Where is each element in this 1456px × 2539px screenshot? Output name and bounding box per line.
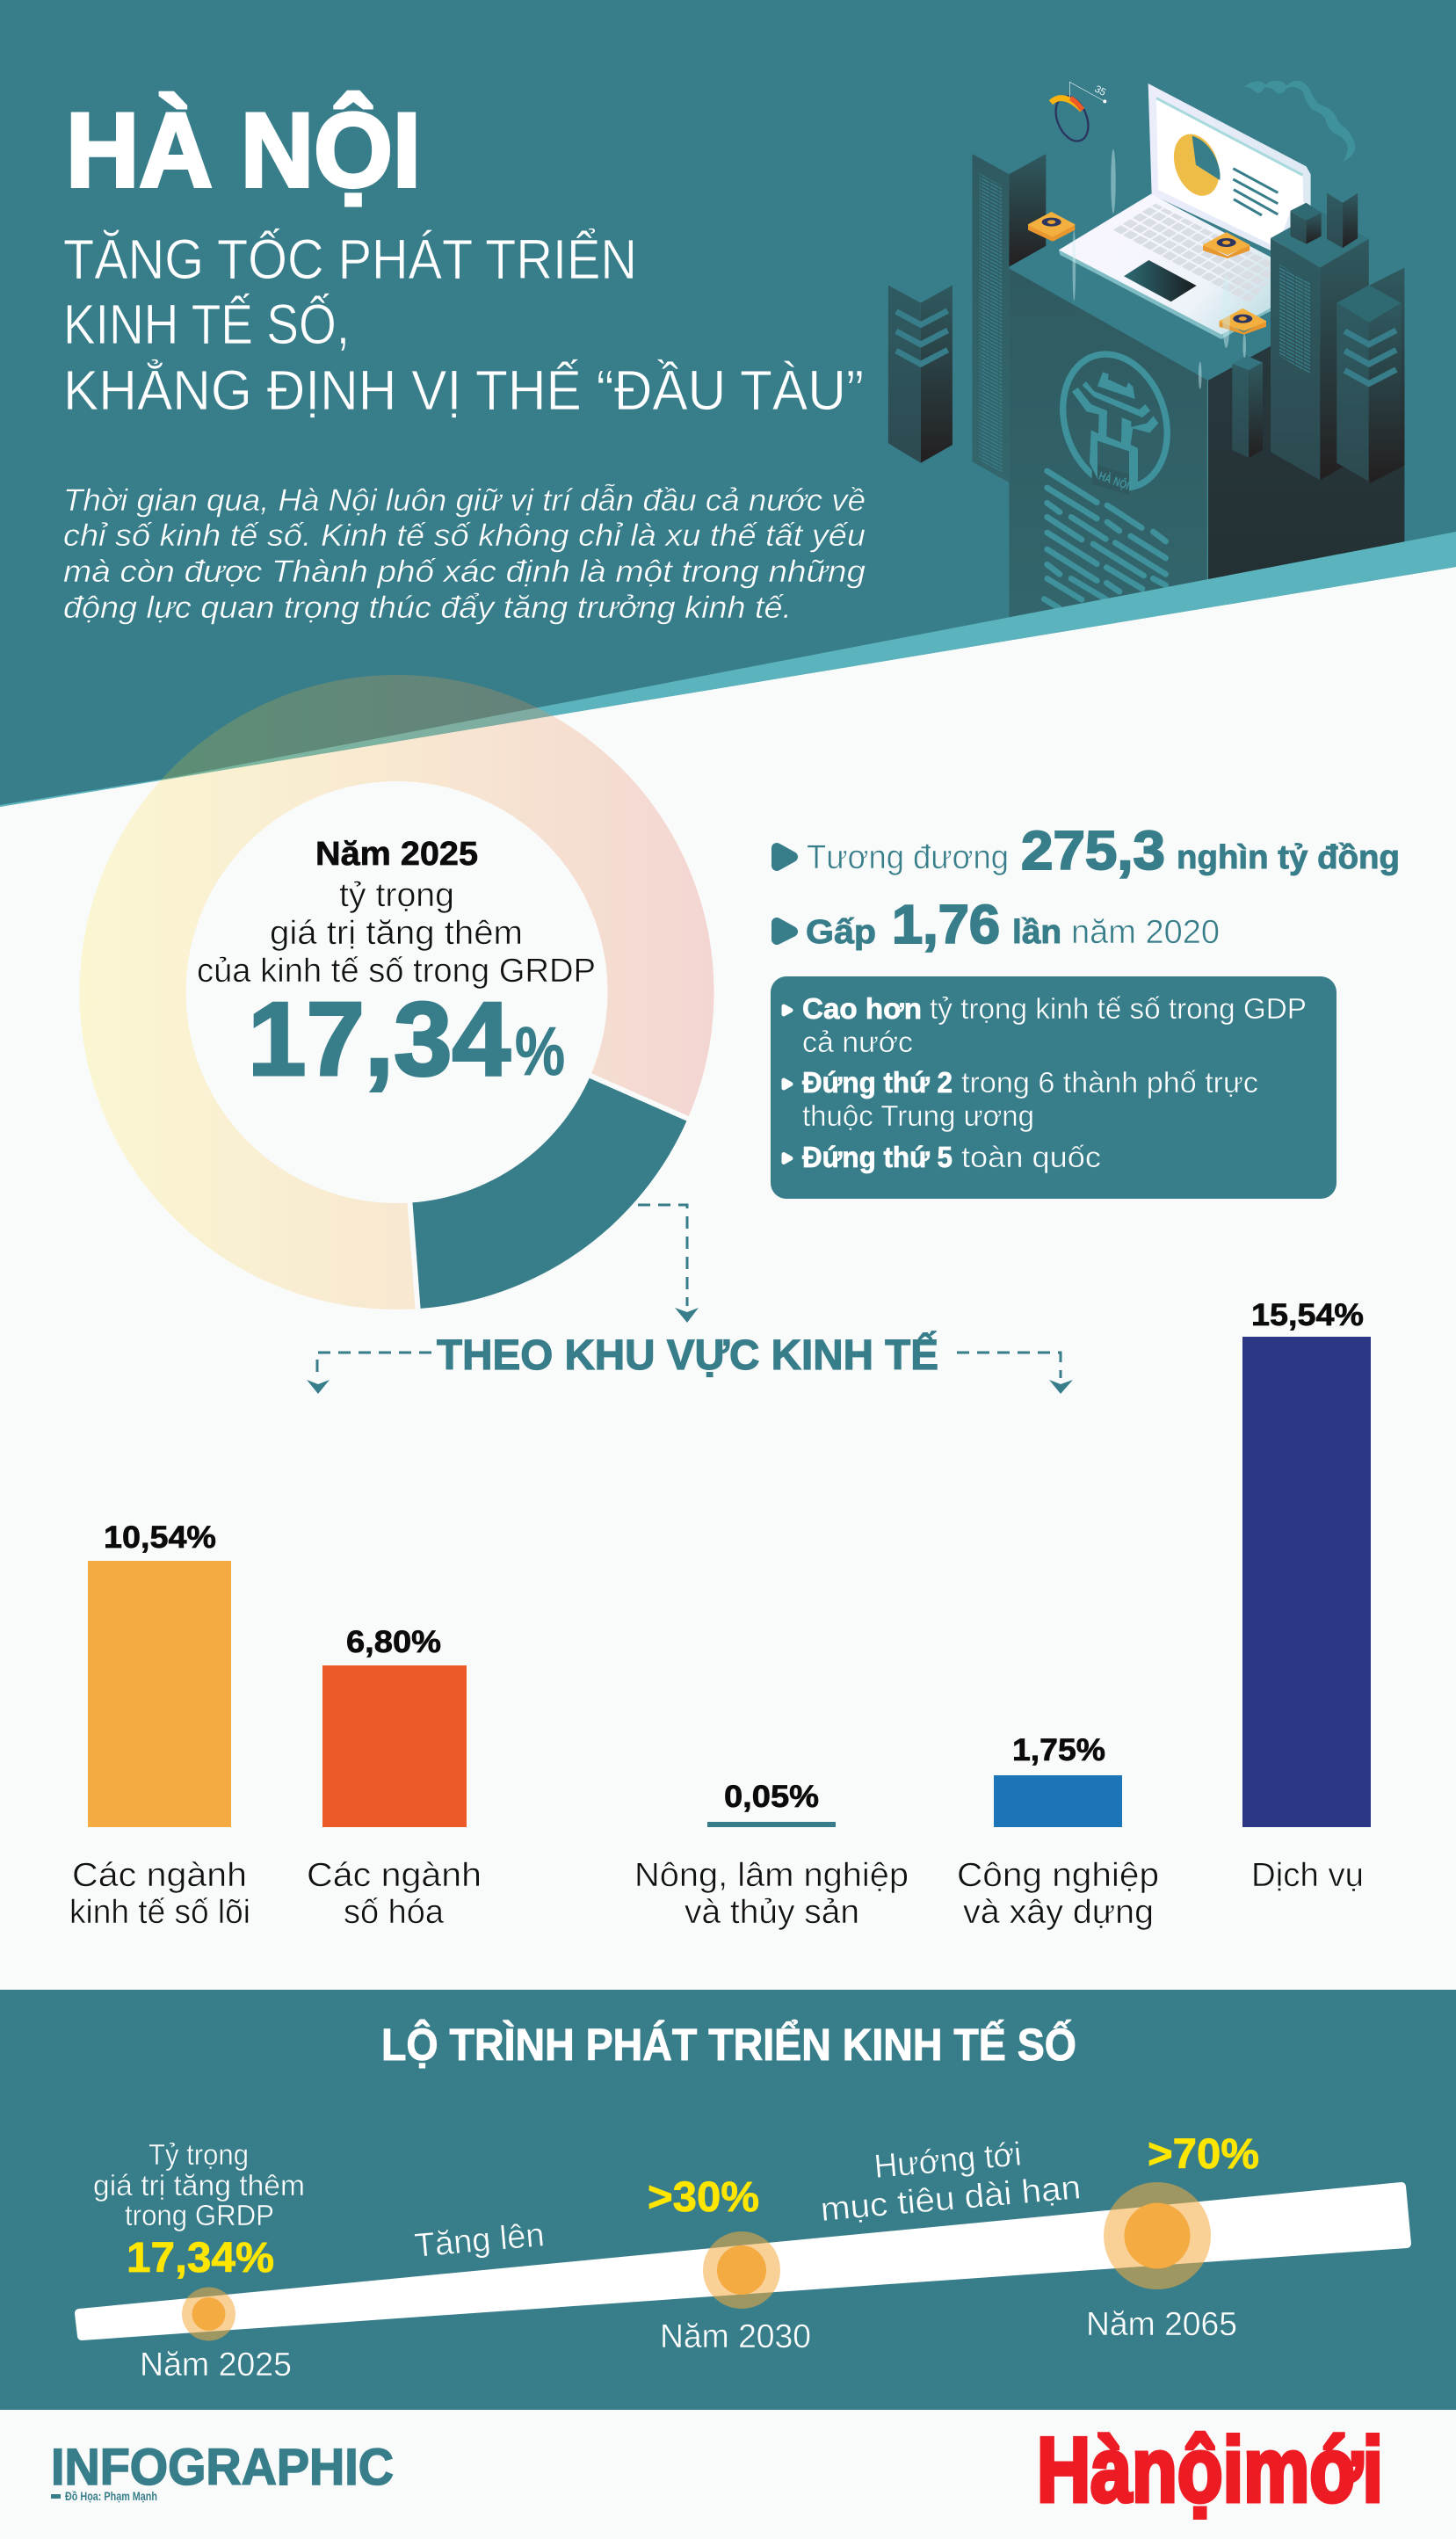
icon: bullet bbox=[784, 1006, 791, 1014]
roadmap heading: LỘ TRÌNH PHÁT TRIỂN KINH TẾ SỐ bbox=[381, 2019, 1076, 2070]
text bars on main building bbox=[1044, 471, 1166, 608]
stat: equivalent value: Tương đương bbox=[807, 839, 1009, 876]
bar: services bbox=[1242, 1298, 1371, 1894]
donut centre text bbox=[197, 836, 596, 1098]
donut centre text: của kinh tế số trong GRDP bbox=[197, 953, 596, 990]
laptop base bbox=[1059, 194, 1289, 337]
intro paragraph: mà còn được Thành phố xác định là một trong những bbox=[63, 555, 866, 589]
bar: industry and construction: Công nghiệp bbox=[957, 1857, 1159, 1894]
stat: multiple of 2020: năm 2020 bbox=[1071, 914, 1220, 951]
bar: digitalised sectors: Các ngành bbox=[307, 1857, 482, 1894]
stat: equivalent value: nghìn tỷ đồng bbox=[1177, 839, 1400, 876]
milestone: 2030 bbox=[648, 2174, 811, 2355]
bar: core digital sectors bbox=[69, 1520, 250, 1931]
label: towards long-term target bbox=[819, 2136, 1083, 2229]
left small tower bbox=[888, 286, 953, 463]
bar chart: economic sectors bbox=[634, 1298, 1371, 1931]
light teal diagonal band bbox=[0, 532, 1456, 807]
milestone: 2025 bbox=[93, 2138, 305, 2383]
white diagonal lower area bbox=[0, 567, 1456, 2539]
orange chips bbox=[1029, 213, 1265, 334]
stat: equivalent value bbox=[777, 821, 1400, 881]
bar: core digital sectors: kinh tế số lõi bbox=[69, 1894, 250, 1931]
tall tower bbox=[972, 154, 1046, 482]
bar: industry and construction: 1,75% bbox=[1012, 1733, 1105, 1767]
milestone: 2065: Năm 2065 bbox=[1086, 2306, 1237, 2343]
icon: play triangle bbox=[777, 923, 793, 939]
icon: cloud bbox=[1245, 81, 1356, 162]
intro paragraph bbox=[63, 483, 866, 625]
logo: Hà Nội Mới: Hànộimới bbox=[1037, 2419, 1383, 2521]
milestone: 2025: giá trị tăng thêm bbox=[93, 2169, 305, 2202]
light glints bbox=[1073, 149, 1246, 389]
milestone: 2025: Năm 2025 bbox=[140, 2347, 292, 2383]
stat: multiple of 2020: lần bbox=[1012, 914, 1061, 951]
emblem: Hà Nội circle bbox=[1047, 341, 1184, 501]
stat: multiple of 2020: Gấp bbox=[806, 914, 876, 951]
donut centre text: Năm 2025 bbox=[315, 836, 478, 873]
intro paragraph: chỉ số kinh tế số. Kinh tế số không chỉ là xu thế tất yếu bbox=[63, 519, 866, 553]
donut centre text: tỷ trọng bbox=[339, 877, 454, 914]
milestone: 2025: 17,34% bbox=[127, 2235, 274, 2281]
arrow: left branch bbox=[307, 1353, 431, 1394]
bar: services: Dịch vụ bbox=[1251, 1857, 1364, 1894]
stat: multiple of 2020: 1,76 bbox=[892, 895, 1000, 955]
intro paragraph: động lực quan trọng thúc đẩy tăng trưởng kinh tế. bbox=[63, 591, 792, 625]
panel: rankings bbox=[771, 976, 1336, 1199]
bar: digitalised sectors: 6,80% bbox=[346, 1625, 441, 1659]
milestone: 2065 bbox=[1086, 2131, 1259, 2343]
milestone: 2025: trong GRDP bbox=[125, 2199, 274, 2231]
donut centre text: % bbox=[515, 1012, 565, 1090]
panel: rankings: tỷ trọng kinh tế số trong GDP bbox=[930, 992, 1307, 1025]
donut centre text: giá trị tăng thêm bbox=[270, 915, 523, 952]
icon: bullet bbox=[784, 1080, 791, 1088]
panel: rankings: Đứng thứ 2 bbox=[802, 1066, 953, 1099]
illustration: isometric city with laptop bbox=[888, 81, 1404, 633]
bar: digitalised sectors bbox=[307, 1625, 482, 1931]
bar chart: digital economy groups bbox=[69, 1520, 482, 1931]
bar: agriculture bbox=[634, 1780, 909, 1931]
emblem: Hà Nội circle: HÀ NỘI bbox=[1097, 469, 1131, 492]
timeline bar bbox=[79, 2187, 1407, 2336]
bar: agriculture: 0,05% bbox=[724, 1780, 819, 1814]
panel: rankings: Cao hơn bbox=[802, 992, 922, 1025]
stat: multiple of 2020 bbox=[777, 895, 1220, 955]
donut centre text: 17,34 bbox=[248, 981, 511, 1098]
panel: rankings: thuộc Trung ương bbox=[802, 1099, 1034, 1132]
city buildings behind laptop bbox=[888, 154, 1404, 633]
panel: digital economy roadmap bbox=[0, 1990, 1456, 2410]
label: towards long-term target: mục tiêu dài hạn bbox=[819, 2169, 1083, 2229]
footer: infographic brand: Đồ Họa: Phạm Mạnh bbox=[65, 2489, 157, 2503]
screen text lines bbox=[1233, 169, 1278, 215]
milestone: 2030: >30% bbox=[648, 2174, 759, 2221]
panel: rankings: trong 6 thành phố trực bbox=[961, 1066, 1258, 1099]
panel: rankings: toàn quốc bbox=[961, 1141, 1101, 1173]
panel: rankings: Đứng thứ 5 bbox=[802, 1141, 953, 1173]
header background bbox=[0, 0, 1456, 809]
intro paragraph: Thời gian qua, Hà Nội luôn giữ vị trí dẫn đầu cả nước về bbox=[63, 483, 866, 518]
donut remainder segment bbox=[80, 675, 714, 1309]
bar: core digital sectors: 10,54% bbox=[104, 1520, 216, 1555]
bar: industry and construction: và xây dựng bbox=[963, 1894, 1154, 1931]
subtitle: KINH TẾ SỐ, bbox=[63, 293, 350, 356]
donut chart bbox=[80, 675, 714, 1314]
subtitle: KHẲNG ĐỊNH VỊ THẾ “ĐẦU TÀU” bbox=[63, 358, 864, 422]
bar: industry and construction bbox=[957, 1733, 1159, 1931]
bar: digitalised sectors: số hóa bbox=[344, 1894, 445, 1931]
milestone: 2025: Tỷ trọng bbox=[148, 2138, 249, 2171]
label: increase: Tăng lên bbox=[413, 2216, 546, 2265]
icon: play triangle bbox=[777, 848, 793, 866]
title: HÀ NỘI bbox=[66, 91, 421, 209]
milestone: 2030: Năm 2030 bbox=[660, 2318, 811, 2355]
bar: services: 15,54% bbox=[1251, 1298, 1364, 1332]
subtitle bbox=[63, 227, 864, 422]
icon: gauge ring bbox=[1050, 82, 1107, 146]
label: towards long-term target: Hướng tới bbox=[873, 2136, 1023, 2186]
section heading: by economic sector: THEO KHU VỰC KINH TẾ bbox=[437, 1331, 938, 1379]
bar: agriculture: và thủy sản bbox=[685, 1894, 859, 1931]
icon: gauge ring: 35 bbox=[1093, 83, 1107, 98]
donut highlighted segment bbox=[410, 1076, 688, 1309]
panel: rankings: cả nước bbox=[802, 1026, 913, 1058]
trackpad bbox=[1124, 260, 1197, 301]
bar: agriculture: Nông, lâm nghiệp bbox=[634, 1857, 909, 1894]
icon: bullet bbox=[784, 1155, 791, 1162]
main building bbox=[1009, 268, 1404, 633]
chart: pie on screen bbox=[1166, 127, 1228, 202]
laptop bbox=[1059, 83, 1311, 339]
arrow: donut to section heading bbox=[638, 1205, 699, 1323]
footer: infographic brand: INFOGRAPHIC bbox=[51, 2439, 394, 2496]
laptop screen bbox=[1148, 83, 1311, 255]
arrow: right branch bbox=[957, 1353, 1073, 1394]
milestone: 2065: >70% bbox=[1148, 2131, 1259, 2178]
right towers bbox=[1232, 193, 1404, 483]
bar: core digital sectors: Các ngành bbox=[72, 1857, 247, 1894]
stat: equivalent value: 275,3 bbox=[1021, 821, 1165, 881]
subtitle: TĂNG TỐC PHÁT TRIỂN bbox=[63, 227, 637, 291]
